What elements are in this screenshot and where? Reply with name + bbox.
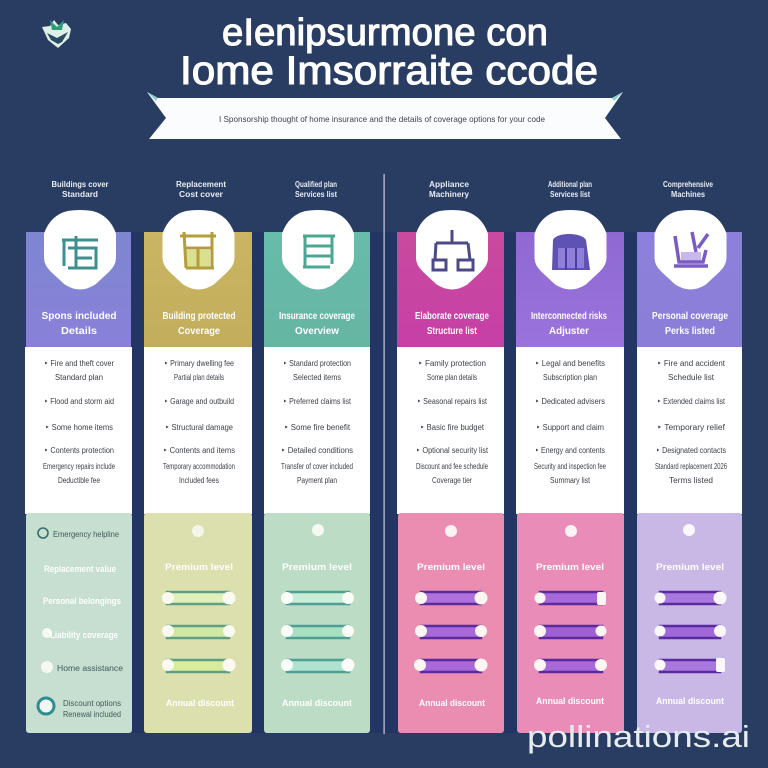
column 1 header panel xyxy=(26,232,131,348)
column 3 icon badge xyxy=(284,212,352,288)
column 1 bottom panel xyxy=(26,513,132,733)
column 2 bottom label: Premium level xyxy=(165,562,233,572)
column 1 benefit rows: Liability coverage xyxy=(50,630,118,640)
column 3 top label: Services list xyxy=(295,190,337,199)
column 1 top label: Buildings cover xyxy=(52,180,108,189)
column 4 feature list: ‣ Basic fire budget xyxy=(420,423,485,432)
column 5 heading: Interconnected risks xyxy=(531,311,607,322)
column 3 feature list: ‣ Preferred claims list xyxy=(283,397,352,406)
column 5 bottom label: Premium level xyxy=(536,562,604,572)
column 6 feature list: ‣ Fire and accident xyxy=(657,359,726,368)
column 5 footer label: Annual discount xyxy=(536,696,604,706)
column 1 benefit rows: Renewal included xyxy=(63,710,121,719)
column 5 bottom panel xyxy=(517,513,624,733)
column 2 feature list: ‣ Structural damage xyxy=(165,423,234,432)
subtitle ribbon banner: I Sponsorship thought of home insurance and the details of coverage options for your code xyxy=(219,114,545,124)
title: eIenipsurmone con xyxy=(222,12,548,54)
column 6 feature list: Terms listed xyxy=(669,476,713,485)
column 5 header panel xyxy=(516,232,624,348)
column 4 bottom dot xyxy=(445,525,457,537)
column 3 bottom dot xyxy=(312,524,324,536)
column 2 rating bars xyxy=(162,592,236,672)
column 3 white list panel xyxy=(264,347,370,514)
column 3 feature list: ‣ Detailed conditions xyxy=(281,446,353,455)
column 6 top label: Machines xyxy=(671,190,706,199)
column 1 white list panel xyxy=(25,347,132,514)
column 5 top label: Services list xyxy=(550,190,590,199)
column 4 top label: Appliance xyxy=(429,180,470,189)
column 4 xyxy=(397,180,504,733)
column 6 white list panel xyxy=(637,347,742,514)
column 2 feature list: Partial plan details xyxy=(174,373,224,382)
subtitle ribbon banner xyxy=(147,92,623,139)
column 4 feature list: ‣ Seasonal repairs list xyxy=(417,397,488,406)
column 3 feature list: Payment plan xyxy=(297,476,337,485)
column 6 heading: Perks listed xyxy=(665,326,715,337)
column 3 bottom label: Premium level xyxy=(282,562,352,572)
column 1 top label: Standard xyxy=(62,190,98,199)
column 2 feature list: Temporary accommodation xyxy=(163,462,235,471)
column 6 heading: Personal coverage xyxy=(652,311,728,322)
column 5 feature list: ‣ Dedicated advisers xyxy=(535,397,605,406)
column 5 xyxy=(516,180,624,733)
column 1 benefit rows: Replacement value xyxy=(44,564,116,574)
column 4 feature list: ‣ Family protection xyxy=(418,359,486,368)
column 1 feature list: Emergency repairs include xyxy=(43,462,115,471)
column 3 heading: Overview xyxy=(295,326,339,337)
column 3 bottom panel xyxy=(264,513,370,733)
column 5 heading: Adjuster xyxy=(549,326,589,337)
column 4 feature list: Discount and fee schedule xyxy=(416,462,488,471)
column 1 xyxy=(25,180,132,733)
column 4 feature list: Coverage tier xyxy=(432,476,472,485)
column 2 top label: Replacement xyxy=(176,180,226,189)
column 4 feature list: ‣ Optional security list xyxy=(416,446,489,455)
icon: logo shield xyxy=(42,20,71,48)
column 3 rating bars xyxy=(281,592,354,672)
column 3 footer label: Annual discount xyxy=(282,698,352,708)
column 3 feature list: ‣ Standard protection xyxy=(283,359,351,368)
column 6 feature list: ‣ Extended claims list xyxy=(657,397,726,406)
column 2 xyxy=(144,180,252,733)
divider between plan groups xyxy=(384,174,385,734)
column 3 xyxy=(264,180,370,733)
column 1 feature list: ‣ Flood and storm aid xyxy=(44,397,114,406)
column 1 feature list: ‣ Some home items xyxy=(45,423,113,432)
column 1 benefit rows: Discount options xyxy=(63,699,121,708)
column 2 icon badge xyxy=(164,212,232,288)
column 4 white list panel xyxy=(397,347,504,514)
column 5 feature list: Subscription plan xyxy=(543,373,597,382)
column 3 feature list: Transfer of cover included xyxy=(281,462,353,471)
column 4 top label: Machinery xyxy=(429,190,470,199)
title: Iome Imsorraite ccode xyxy=(180,49,598,93)
column 3 header panel xyxy=(264,232,370,348)
column 5 feature list: ‣ Legal and benefits xyxy=(535,359,605,368)
column 1 heading: Details xyxy=(61,326,97,337)
column 1 feature list: ‣ Fire and theft cover xyxy=(44,359,114,368)
column 3 feature list: Selected items xyxy=(293,373,341,382)
column 6 header panel xyxy=(637,232,742,348)
column 1 icon badge xyxy=(46,212,114,288)
column 5 feature list: ‣ Energy and contents xyxy=(535,446,605,455)
column 1 feature list: Standard plan xyxy=(55,373,103,382)
title xyxy=(180,12,598,93)
column 2 top label: Cost cover xyxy=(179,190,223,199)
column 2 feature list: ‣ Contents and items xyxy=(163,446,235,455)
column 2 feature list: ‣ Garage and outbuild xyxy=(164,397,234,406)
column 6 xyxy=(637,180,742,733)
column 2 footer label: Annual discount xyxy=(166,698,234,708)
column 1 benefit rows: Personal belongings xyxy=(43,596,121,606)
column 6 icon badge xyxy=(656,212,724,288)
column 1 benefit rows: Emergency helpline xyxy=(53,530,120,539)
column 4 footer label: Annual discount xyxy=(419,698,485,708)
column 5 feature list: Summary list xyxy=(550,476,591,485)
column 6 feature list: ‣ Designated contacts xyxy=(656,446,726,455)
column 5 icon badge xyxy=(536,212,604,288)
column 3 heading: Insurance coverage xyxy=(279,311,355,322)
column 2 heading: Building protected xyxy=(162,311,236,322)
column 3 feature list: ‣ Some fire benefit xyxy=(284,423,351,432)
column 6 bottom dot xyxy=(683,524,695,536)
column 5 feature list: ‣ Support and claim xyxy=(536,423,604,432)
column 2 white list panel xyxy=(144,347,252,514)
column 1 benefit rows: Home assistance xyxy=(57,664,124,673)
column 5 rating bars xyxy=(534,592,607,672)
column 1 benefit rows xyxy=(38,528,124,719)
column 2 bottom dot xyxy=(192,525,204,537)
column 6 bottom label: Premium level xyxy=(656,562,724,572)
column 4 icon badge xyxy=(418,212,486,288)
column 1 feature list: Deductible fee xyxy=(58,476,100,485)
column 1 feature list: ‣ Contents protection xyxy=(44,446,114,455)
column 6 footer label: Annual discount xyxy=(656,696,724,706)
column 5 feature list: Security and inspection fee xyxy=(534,462,606,471)
column 6 feature list: Schedule list xyxy=(668,373,715,382)
column 6 feature list: Standard replacement 2026 xyxy=(655,462,727,471)
column 2 bottom panel xyxy=(144,513,252,733)
column 3 top label: Qualified plan xyxy=(295,180,337,189)
column 4 feature list: Some plan details xyxy=(427,373,477,382)
column 4 bottom label: Premium level xyxy=(417,562,485,572)
column 2 feature list: ‣ Primary dwelling fee xyxy=(164,359,234,368)
column 6 feature list: ‣ Temporary relief xyxy=(657,423,726,432)
column 1 heading: Spons included xyxy=(42,311,116,322)
column 4 heading: Elaborate coverage xyxy=(415,311,489,322)
column 4 header panel xyxy=(397,232,504,348)
column 4 bottom panel xyxy=(398,513,504,733)
column 6 rating bars xyxy=(654,592,726,672)
column 2 header panel xyxy=(144,232,252,348)
column 4 heading: Structure list xyxy=(427,326,478,337)
column 2 feature list: Included fees xyxy=(179,476,219,485)
column 5 bottom dot xyxy=(565,525,577,537)
column 2 heading: Coverage xyxy=(178,326,220,337)
watermark: pollinations.ai xyxy=(527,719,750,754)
column 6 top label: Comprehensive xyxy=(663,180,713,189)
column 6 bottom panel xyxy=(637,513,742,733)
column 5 top label: Additional plan xyxy=(548,180,592,189)
column 5 white list panel xyxy=(516,347,624,514)
column 4 rating bars xyxy=(414,592,488,672)
